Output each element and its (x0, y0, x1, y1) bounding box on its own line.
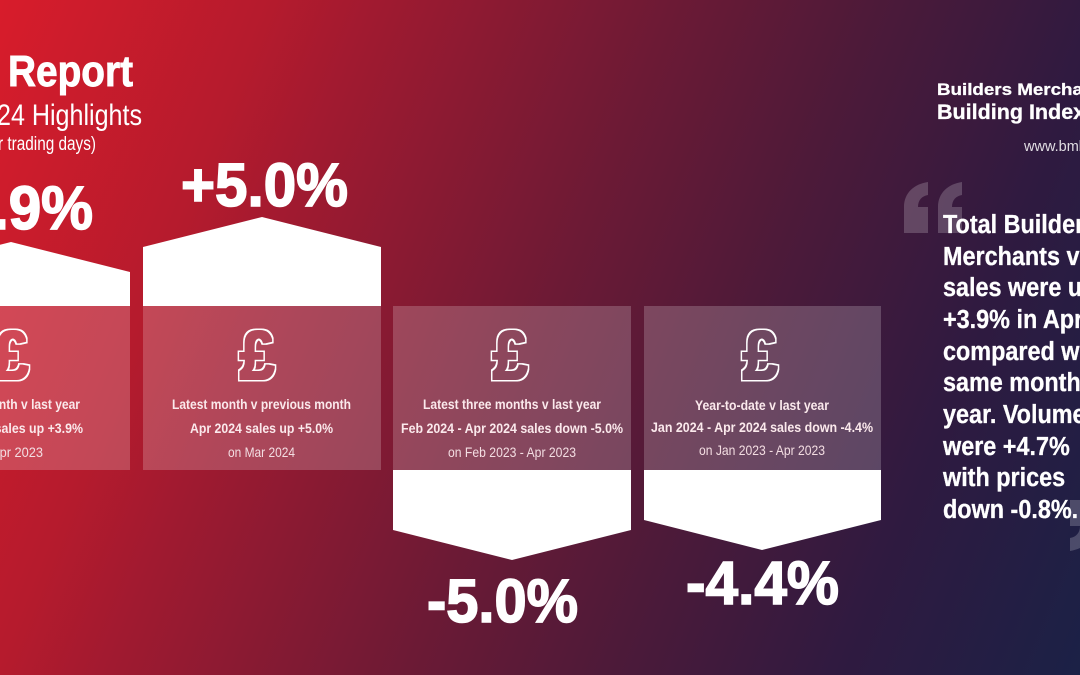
panel: latest month v last year (0, 174, 130, 470)
icon: pound: £ (492, 317, 528, 394)
card text (401, 396, 623, 460)
icon: closing quote mark (1070, 500, 1080, 551)
card text: on Feb 2023 - Apr 2023 (448, 444, 576, 460)
icon: pound: £ (742, 317, 778, 394)
card (143, 306, 381, 470)
card text (0, 396, 83, 460)
quote text: with prices (942, 464, 1065, 492)
arrow down shape (393, 470, 631, 560)
title (0, 47, 142, 155)
quote text (942, 211, 1080, 524)
panel: year-to-date v last year (644, 306, 881, 617)
card text (172, 396, 351, 460)
icon: pound: £ (240, 317, 274, 394)
card text: Latest three months v last year (423, 396, 601, 412)
card (393, 306, 631, 470)
arrow up shape (143, 217, 381, 306)
value: -5.0% (427, 567, 578, 635)
quote text: were +4.7% (942, 433, 1070, 461)
card text: Feb 2024 - Apr 2024 sales down -5.0% (401, 420, 623, 436)
subheading: highlights: 24 Highlights (0, 99, 142, 132)
panel: latest three months v last year (393, 306, 631, 635)
quote text: down -0.8%. (943, 496, 1078, 524)
heading: report: Report (8, 47, 133, 96)
icon: opening quote mark (904, 182, 962, 233)
card (0, 306, 130, 470)
card text: Apr 2024 sales up +5.0% (190, 420, 333, 436)
note: trading days: r trading days) (0, 134, 96, 155)
value: +5.0% (181, 151, 348, 219)
logo (937, 81, 1080, 155)
card text: Latest month v previous month (172, 396, 351, 412)
value: -4.4% (686, 549, 839, 617)
card text: Jan 2024 - Apr 2024 sales down -4.4% (651, 419, 873, 435)
card (644, 306, 881, 470)
card text (651, 397, 873, 458)
card text: on Mar 2024 (228, 444, 295, 460)
card text: Year-to-date v last year (695, 397, 829, 413)
panel: latest month v previous month (143, 151, 381, 470)
arrow up shape (0, 242, 130, 306)
card text: on Jan 2023 - Apr 2023 (699, 442, 825, 458)
arrow down shape (644, 470, 881, 550)
